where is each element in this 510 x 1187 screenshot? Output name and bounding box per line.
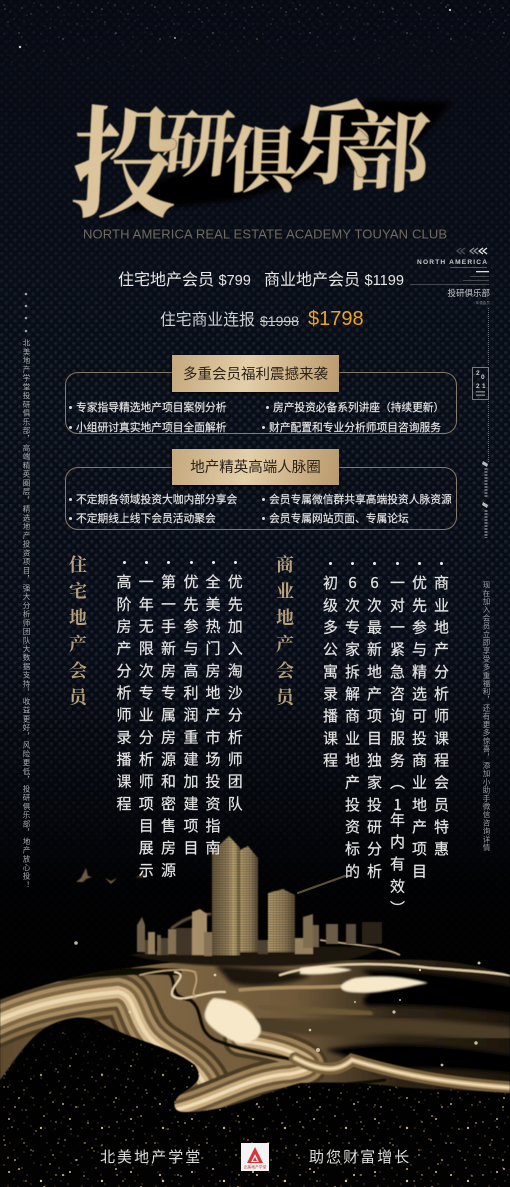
panel: elite network <box>65 449 457 530</box>
column: 优先参与高利润重建加建项目 <box>180 574 202 862</box>
price line 1: commercial member: 商业地产会员 $1199 <box>264 272 404 289</box>
icon: birds <box>76 868 149 884</box>
streaks <box>172 876 345 928</box>
column: 商业地产分析师课程会员特惠 <box>431 574 452 863</box>
ground <box>130 946 380 966</box>
brand block top right: 投研俱乐部 <box>447 287 490 299</box>
city skyline <box>130 836 382 966</box>
column: 第一手新房专属房源和密售房源 <box>158 574 179 884</box>
small buildings left <box>137 909 212 956</box>
banner heading: network <box>172 449 339 485</box>
brand block top right: 1 <box>482 383 486 390</box>
title: 投研俱乐部 with brush stroke: 乐 <box>287 71 382 203</box>
brand block top right: NORTH AMERICA <box>417 259 487 266</box>
price line 2: bundle: $1798 <box>308 308 364 330</box>
title: 投研俱乐部 with brush stroke: 研 <box>158 87 241 191</box>
illustration: city skyline and gold liquid <box>0 836 510 1113</box>
footer text right: 助您财富增长 <box>309 1146 411 1167</box>
column: 高阶房产分析师录播课程 <box>114 574 134 817</box>
brand block top right: 2 <box>476 383 480 390</box>
banner heading: benefits <box>172 355 339 392</box>
price line 2: bundle: 住宅商业连报 <box>160 312 255 329</box>
banner heading: network: 地产精英高端人脉圈 <box>190 456 321 477</box>
liquid sparkles <box>74 941 480 1066</box>
price line 1: residential member: 住宅地产会员 $799 <box>118 272 251 289</box>
network item: 不定期各领域投资大咖内部分享会 <box>76 492 237 507</box>
heading: commercial member: 商业地产会员 <box>272 555 298 714</box>
price line 2: bundle: $1998 <box>260 313 299 329</box>
benefit item: 财产配置和专业分析师项目咨询服务 <box>269 420 441 435</box>
column: 6次最新地产项目独家投研分析 <box>364 574 385 885</box>
left vertical slogan: 北美地产学堂投研俱乐部，高端精英圈层，精选地产投资项目，强大分析师团队大数据支持，收益更好，风险更低，投研俱乐部，地产放心投！ <box>21 339 32 890</box>
brush stroke <box>125 100 452 212</box>
panel: commercial member <box>272 555 452 922</box>
column: 全美热门房地产市场投资指南 <box>202 574 224 862</box>
title: 投研俱乐部 with brush stroke <box>68 68 450 242</box>
logo <box>241 1143 269 1171</box>
benefit item: 专家指导精选地产项目案例分析 <box>76 400 227 415</box>
panel: residential member <box>65 555 246 884</box>
dark seams <box>60 971 385 1096</box>
right vertical call to action: 现在加入会员立即享受多重福利，还有更多惊喜，添加小助手微信咨询详情 <box>481 581 492 852</box>
brand block top right <box>410 248 490 538</box>
bright highlights <box>205 967 428 1044</box>
left fold contours <box>0 992 205 1085</box>
network item: 会员专属网站页面、专属论坛 <box>269 511 409 526</box>
dark areas right <box>215 965 510 1074</box>
small buildings right <box>258 914 382 954</box>
logo: 北美地产学堂 <box>244 1164 267 1170</box>
middle tower <box>268 889 295 952</box>
brand block top right: 2 <box>476 370 480 377</box>
brand block top right: 0 <box>481 374 485 381</box>
benefit item: 房产投资必备系列讲座（持续更新） <box>273 400 444 415</box>
main towers <box>212 836 240 955</box>
column: 初级多公寓录播课程 <box>320 574 341 774</box>
brand block top right: 年费会员 <box>476 300 490 306</box>
left vertical slogan dots <box>24 292 28 332</box>
subtitle: NORTH AMERICA REAL ESTATE ACADEMY TOUYAN CLUB <box>83 226 447 242</box>
network item: 不定期线上线下会员活动聚会 <box>76 511 216 526</box>
column: 优先参与精选可投商业地产项目 <box>409 574 430 885</box>
footer text left: 北美地产学堂 <box>100 1146 202 1167</box>
column: 一对一紧急咨询服务（ 1 年内有效） <box>387 574 408 922</box>
column: 6次专家拆解商业地产投资标的 <box>342 574 363 885</box>
right strands <box>140 964 510 1088</box>
title: 投研俱乐部 with brush stroke: 部 <box>343 83 433 210</box>
gold liquid <box>0 940 510 1115</box>
banner heading: benefits: 多重会员福利震撼来袭 <box>183 363 328 384</box>
benefit item: 小组研讨真实地产项目全面解析 <box>76 420 227 435</box>
heading: residential member: 住宅地产会员 <box>65 555 91 714</box>
title: 投研俱乐部 with brush stroke: 投 <box>68 68 183 242</box>
centre-lower contours <box>175 1040 311 1110</box>
column: 优先加入淘沙分析师团队 <box>225 574 246 817</box>
network item: 会员专属微信群共享高端投资人脉资源 <box>269 492 452 507</box>
panel: member benefits <box>65 355 457 435</box>
price line 2: bundle <box>160 308 364 330</box>
column: 一年无限次专业分析师项目展示 <box>136 574 157 884</box>
title: 投研俱乐部 with brush stroke: 俱 <box>223 103 303 207</box>
